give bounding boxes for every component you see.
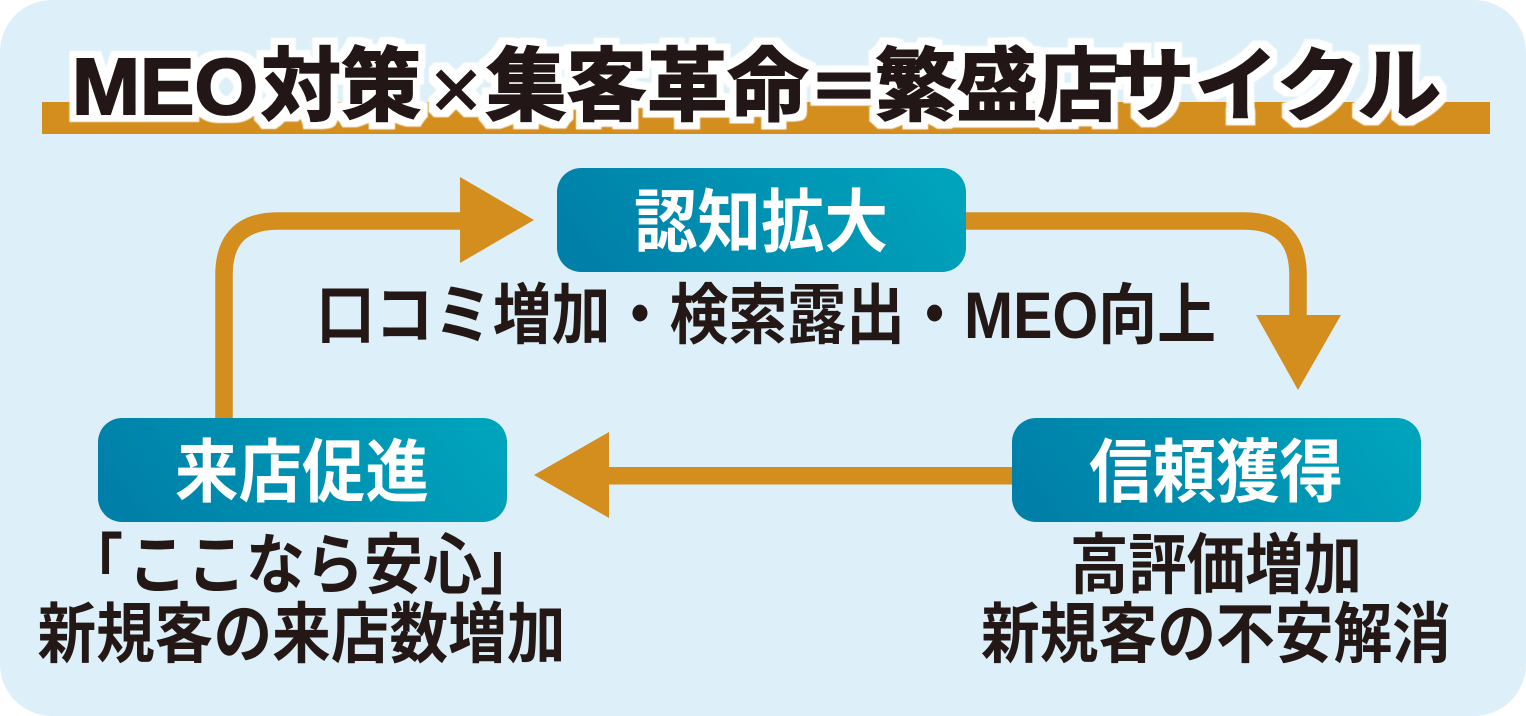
text: visit details [38,528,566,671]
text: trust details: 高評価増加 [1070,528,1362,602]
text: trust details [981,528,1451,671]
arrow: visit to recognition [224,177,534,425]
text: visit details: 」 [480,528,538,602]
text: visit details: ここなら安心 [128,528,482,602]
title: サイクル [1111,22,1441,138]
box: 信頼獲得: 信頼獲得 [1089,434,1343,511]
title underline bar [42,102,1490,134]
title: 繁盛店 [875,22,1119,138]
text: recognition details: 口コミ増加・検索露出・MEO向上 [316,278,1216,352]
title: × [427,45,485,129]
title: ＝ [808,30,880,135]
text: visit details: 新規客の来店数増加 [38,597,566,671]
title: 集客革命 [486,22,808,138]
box: 信頼獲得 [1012,418,1421,522]
box: 来店促進 [98,418,507,522]
title: 対策 [261,22,421,138]
title [72,22,1441,138]
box: 認知拡大 [557,168,966,272]
box: 認知拡大: 認知拡大 [634,184,888,261]
box: 来店促進: 来店促進 [175,434,429,511]
text: trust details: 新規客の不安解消 [981,597,1451,671]
text: visit details: 「 [65,528,123,602]
arrow: recognition to trust [960,221,1341,390]
title: MEO [72,42,258,131]
arrow: trust to visit [534,432,1020,518]
